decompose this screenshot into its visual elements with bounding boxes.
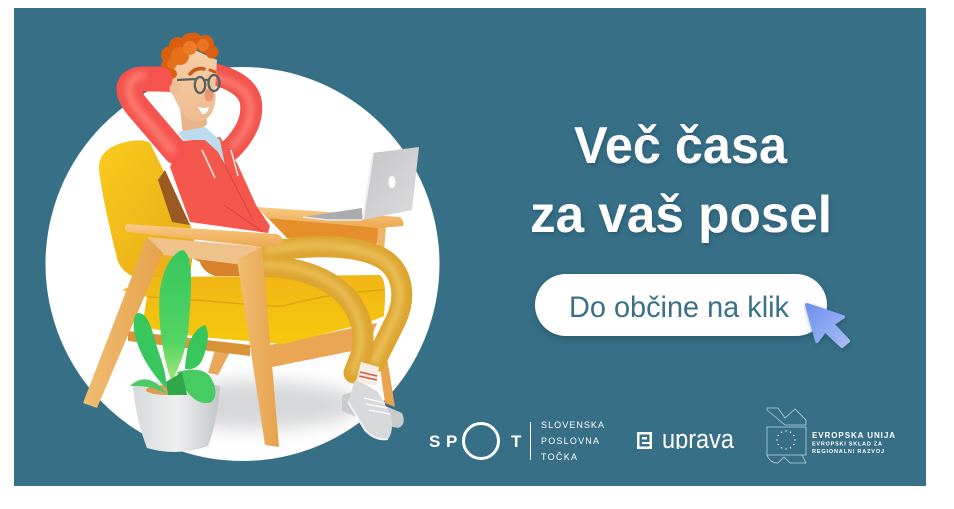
logo: EU: REGIONALNI RAZVOJ <box>812 449 884 455</box>
icon: cursor arrow <box>807 305 848 346</box>
right raised arm <box>129 75 176 152</box>
face and neck <box>170 48 217 134</box>
back armrest <box>257 207 404 228</box>
hoodie body <box>170 137 270 233</box>
logo: EU: EVROPSKA UNIJA <box>812 431 895 440</box>
illustration: man relaxing in armchair <box>83 32 419 452</box>
logo: SPOT: SLOVENSKA <box>541 420 604 430</box>
logo: e-uprava: uprava <box>662 424 735 454</box>
lap <box>192 258 262 276</box>
sneakers <box>342 380 404 439</box>
left raised arm <box>212 74 251 150</box>
chair back legs and rails <box>128 217 395 407</box>
logo: SPOT: POSLOVNA <box>541 436 599 446</box>
heading <box>530 117 832 244</box>
near trouser leg <box>264 265 363 373</box>
heading: za vaš posel <box>530 186 832 244</box>
logo: SPOT: P <box>446 432 457 451</box>
potted plant <box>130 250 220 452</box>
chair back cushion <box>99 140 195 278</box>
right raised arm back part <box>142 79 172 80</box>
white circle with ground shadow <box>46 67 440 461</box>
glasses <box>177 75 220 93</box>
logo: SPOT: TOČKA <box>541 452 577 462</box>
shirt collar <box>178 127 225 165</box>
chair seat cushion <box>122 275 385 344</box>
logo: SPOT: S <box>429 432 440 451</box>
laptop <box>303 147 419 220</box>
logo: EU <box>767 408 895 463</box>
front armrest <box>147 237 262 265</box>
button: Do občine na klik <box>569 291 790 324</box>
logo: EU: EVROPSKI SKLAD ZA <box>812 442 882 448</box>
logo: e-uprava <box>637 432 734 449</box>
hair <box>161 32 218 79</box>
socks <box>356 362 379 386</box>
shadow between cushion and hoodie <box>158 170 190 225</box>
logo: SPOT <box>429 420 604 462</box>
logo: SPOT: T <box>511 432 522 451</box>
far trouser leg <box>268 245 402 362</box>
heading: Več časa <box>574 117 788 175</box>
button <box>535 274 827 336</box>
front chair legs <box>83 237 163 408</box>
